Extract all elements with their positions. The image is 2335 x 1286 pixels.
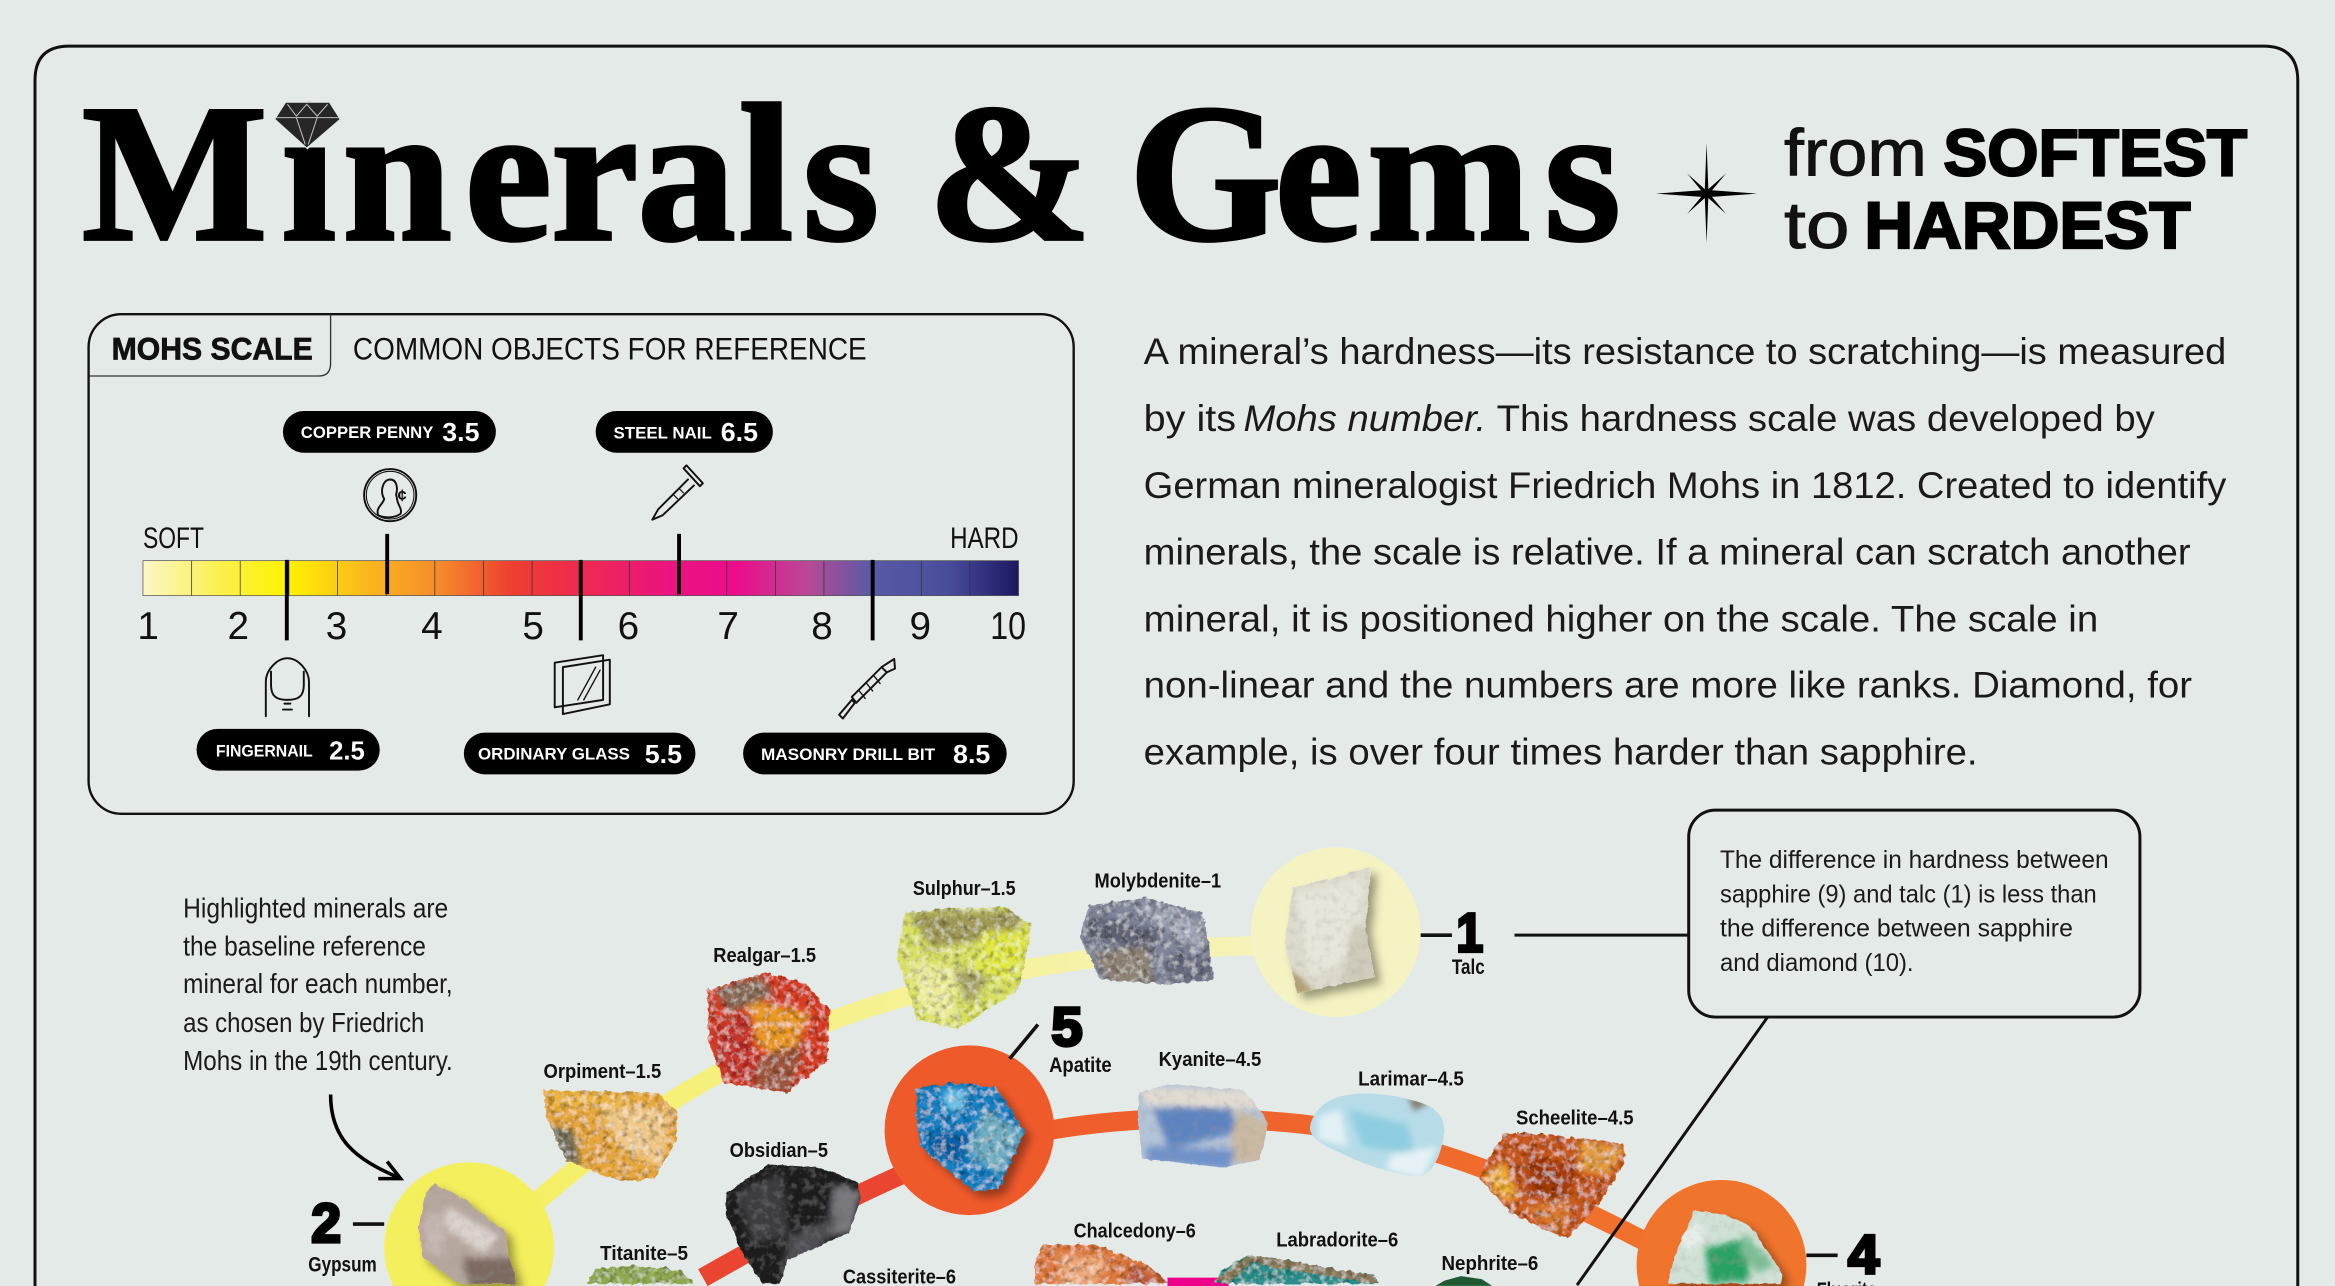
callout box: sapphire (9) and talc (1) is less than [1720, 880, 2097, 908]
number 5: apatite [1010, 995, 1112, 1077]
pill: masonry drill bit: 8.5 [953, 739, 990, 769]
rock labels: Labradorite–6 [1276, 1229, 1398, 1251]
subtitle [1784, 117, 2247, 262]
subtitle: from [1784, 117, 1927, 190]
pill: fingernail: 2.5 [329, 735, 365, 765]
callout line [1577, 1017, 1768, 1285]
icon: penny: ¢ [398, 487, 407, 505]
intro paragraph: example, is over four times harder than sapphire. [1144, 731, 1978, 773]
icon: masonry drill bit [839, 659, 895, 718]
yellow hardness arc [506, 946, 1336, 1229]
intro paragraph [1144, 330, 2227, 773]
intro paragraph: mineral, it is positioned higher on the scale. The scale in [1144, 597, 2098, 639]
circle: apatite [885, 1045, 1054, 1215]
intro paragraph: non-linear and the numbers are more like ranks. Diamond, for [1144, 664, 2192, 706]
note: highlighted minerals: Highlighted minerals are [183, 892, 448, 923]
note: highlighted minerals: the baseline reference [183, 930, 426, 961]
rock: chalcedony [1035, 1245, 1169, 1286]
scale numbers: 9 [910, 605, 931, 648]
number 1: talc: 1 [1456, 902, 1483, 964]
rock labels: Scheelite–4.5 [1516, 1107, 1634, 1129]
panel subtitle: COMMON OBJECTS FOR REFERENCE [353, 332, 867, 367]
scale numbers [137, 605, 1026, 648]
pill: fingernail: FINGERNAIL [216, 742, 313, 760]
rock labels [544, 871, 1634, 1286]
number 4: fluorite: 4 [1848, 1223, 1880, 1285]
pill: steel nail: 6.5 [721, 417, 758, 447]
rock labels: Realgar–1.5 [713, 945, 816, 967]
orange hardness arc [969, 1118, 1721, 1284]
intro paragraph: A mineral’s hardness—its resistance to scratching—is measured [1144, 330, 2226, 372]
rock labels: Orpiment–1.5 [544, 1061, 661, 1083]
scale numbers: 6 [618, 605, 639, 648]
intro paragraph: This hardness scale was developed by [1497, 397, 2155, 439]
hard label: HARD [950, 522, 1019, 555]
pill: ordinary glass: ORDINARY GLASS [478, 745, 630, 763]
subtitle: HARDEST [1864, 189, 2191, 262]
scale numbers: 1 [137, 605, 159, 648]
callout box: the difference between sapphire [1720, 915, 2073, 943]
number 5: apatite: Apatite [1049, 1054, 1112, 1077]
circle: gypsum [384, 1162, 554, 1286]
rock labels: Kyanite–4.5 [1159, 1049, 1261, 1071]
pill: steel nail: STEEL NAIL [614, 425, 712, 443]
note: highlighted minerals [183, 892, 453, 1076]
rock: orpiment [544, 1090, 678, 1182]
note: highlighted minerals: mineral for each number, [183, 968, 453, 999]
pill: masonry drill bit [743, 733, 1007, 774]
icon: four point star [1656, 143, 1757, 243]
circle: talc [1251, 847, 1421, 1017]
callout box: The difference in hardness between [1720, 846, 2109, 874]
gradient scale bar [143, 561, 1019, 596]
note: highlighted minerals: as chosen by Friedrich [183, 1007, 424, 1038]
rock labels: Molybdenite–1 [1095, 871, 1221, 893]
pill: ordinary glass: 5.5 [645, 739, 682, 769]
pill: copper penny: COPPER PENNY [301, 424, 433, 442]
pill: ordinary glass [464, 733, 695, 774]
tab outline [89, 314, 331, 376]
callout box [1689, 810, 2140, 1017]
number 5: apatite: 5 [1051, 995, 1083, 1057]
rock: scheelite [1479, 1133, 1626, 1239]
red hardness arc [703, 1147, 969, 1278]
icon: steel nail [652, 465, 703, 520]
rock: realgar [707, 972, 829, 1094]
tab heading: MOHS SCALE [112, 332, 313, 367]
pill: copper penny [283, 411, 496, 453]
number 2: gypsum: Gypsum [308, 1254, 377, 1277]
intro paragraph: German mineralogist Friedrich Mohs in 1812. Created to identify [1144, 464, 2227, 506]
soft label: SOFT [143, 522, 204, 555]
rock: titanite [587, 1266, 694, 1284]
title ampersand: & [928, 64, 1091, 282]
pill: copper penny: 3.5 [442, 417, 480, 447]
rock: obsidian [725, 1164, 861, 1284]
title: Minerals [82, 64, 879, 282]
rock: gypsum [418, 1184, 518, 1286]
scale ticks [287, 534, 873, 640]
rock labels: Titanite–5 [600, 1243, 688, 1265]
scale numbers: 7 [717, 605, 739, 648]
scale numbers: 10 [990, 605, 1026, 648]
rock labels: Nephrite–6 [1442, 1253, 1538, 1275]
rock labels: Chalcedony–6 [1074, 1220, 1196, 1242]
rock: larimar [1310, 1094, 1444, 1179]
icon: fingernail [266, 658, 309, 716]
scale numbers: 5 [522, 605, 544, 648]
intro paragraph: by its [1144, 397, 1236, 439]
scale numbers: 8 [811, 605, 833, 648]
scale numbers: 2 [227, 605, 249, 648]
number 2: gypsum: 2 [311, 1192, 341, 1254]
rock: sulphur [896, 907, 1032, 1029]
subtitle: to [1784, 189, 1850, 262]
title second word: Gems [1129, 64, 1621, 282]
rock: molybdenite [1080, 898, 1214, 984]
rock: apatite [916, 1083, 1025, 1191]
icon: ordinary glass [555, 655, 610, 714]
pill: fingernail [197, 729, 380, 771]
subtitle: SOFTEST [1943, 117, 2247, 190]
number 1: talc [1421, 902, 1485, 979]
circle: fluorite [1637, 1180, 1806, 1286]
callout box: and diamond (10). [1720, 949, 1914, 977]
intro paragraph: Mohs number. [1243, 397, 1486, 439]
pill: steel nail [596, 411, 773, 453]
icon: diamond [275, 103, 340, 147]
scale numbers: 3 [326, 605, 347, 648]
number 4: fluorite [1806, 1223, 1880, 1286]
rock: talc [1285, 867, 1377, 995]
arrow: to gypsum [331, 1094, 401, 1179]
rock: labradorite [1214, 1254, 1379, 1284]
number 2: gypsum [308, 1192, 384, 1277]
note: highlighted minerals: Mohs in the 19th century. [183, 1045, 453, 1076]
connector: talc to callout [1514, 934, 1689, 936]
rock: nephrite [1436, 1276, 1492, 1286]
number 1: talc: Talc [1452, 956, 1485, 979]
intro paragraph: minerals, the scale is relative. If a mineral can scratch another [1144, 531, 2191, 573]
icon: penny [364, 469, 416, 521]
rock labels: Larimar–4.5 [1358, 1069, 1464, 1091]
scale numbers: 4 [421, 605, 443, 648]
pill: masonry drill bit: MASONRY DRILL BIT [761, 746, 935, 764]
panel: Mohs scale [89, 314, 1074, 814]
rock labels: Obsidian–5 [730, 1140, 828, 1162]
rock: kyanite [1138, 1084, 1273, 1169]
rock labels: Sulphur–1.5 [913, 878, 1016, 900]
magenta hardness arc [1168, 1278, 1229, 1286]
rock: fluorite [1668, 1211, 1783, 1284]
